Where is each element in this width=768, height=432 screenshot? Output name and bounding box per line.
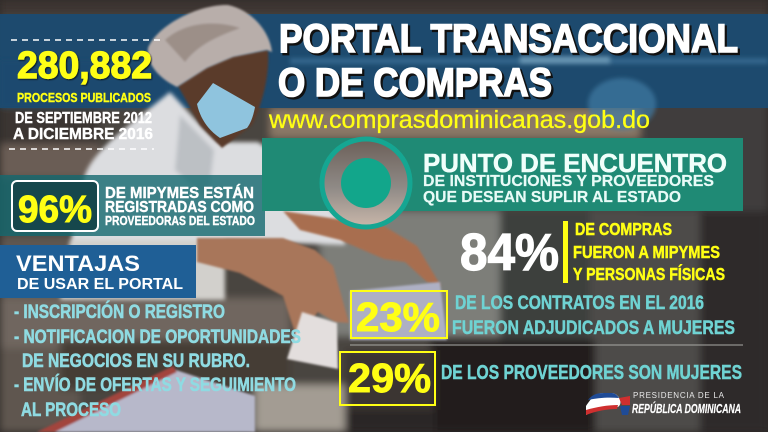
stat: 29%	[340, 352, 742, 405]
84% description	[573, 219, 725, 284]
advantages list: AL PROCESO	[21, 400, 121, 421]
worker arms and hand	[197, 211, 441, 342]
84% description: FUERON A MIPYMES	[573, 242, 720, 262]
icon: flag	[586, 393, 630, 415]
mipymes text: REGISTRADAS COMO	[105, 199, 254, 216]
panel: ventajas heading: VENTAJAS	[16, 251, 140, 276]
panel: ventajas heading: DE USAR EL PORTAL	[17, 276, 183, 293]
panel: punto de encuentro	[262, 138, 743, 227]
title	[278, 17, 740, 107]
stat: 29%: 29%	[348, 355, 431, 401]
hairnet	[148, 5, 272, 87]
stat: 84%: 84%	[460, 224, 559, 282]
title: O DE COMPRAS	[280, 63, 554, 107]
advantages list: DE NEGOCIOS EN SU RUBRO.	[22, 351, 250, 372]
icon: target circle	[322, 139, 410, 227]
photo subject: worker	[37, 5, 447, 432]
panel: 96% mipymes	[0, 175, 265, 236]
84% description: DE COMPRAS	[575, 219, 672, 239]
website url: www.comprasdominicanas.gob.do	[268, 106, 650, 134]
punto heading: PUNTO DE ENCUENTRO	[423, 148, 727, 178]
date range: A DICIEMBRE 2016	[13, 126, 153, 143]
23% description: DE LOS CONTRATOS EN EL 2016	[455, 292, 704, 314]
date range	[13, 110, 153, 143]
96% box: 96%	[18, 189, 92, 231]
number 280,882: 280,882	[17, 45, 152, 87]
mipymes text: PROVEEDORAS DEL ESTADO	[105, 214, 255, 228]
worker neck and face	[178, 50, 268, 148]
23% description	[452, 292, 735, 339]
advantages list: - ENVÍO DE OFERTAS Y SEGUIMIENTO	[14, 374, 296, 396]
punto description: QUE DESEAN SUPLIR AL ESTADO	[423, 189, 681, 206]
stat: 23%	[351, 291, 735, 340]
title: O DE COMPRAS	[278, 61, 552, 105]
logo: presidencia	[586, 391, 741, 416]
advantages list: - INSCRIPCIÓN O REGISTRO	[14, 301, 225, 323]
advantages list	[14, 301, 301, 421]
mipymes text	[105, 183, 255, 228]
date range: DE SEPTIEMBRE 2012	[15, 110, 152, 127]
top blue band	[0, 14, 768, 108]
left stats: processes published	[9, 40, 160, 149]
punto description: DE INSTITUCIONES Y PROVEEDORES	[423, 173, 714, 190]
panel: ventajas heading	[0, 245, 196, 298]
mipymes text: DE MIPYMES ESTÁN	[105, 183, 254, 202]
label processes: PROCESOS PUBLICADOS	[17, 90, 151, 105]
face mask	[197, 83, 255, 138]
logo: presidencia: PRESIDENCIA DE LA	[633, 391, 725, 400]
stat: 23%: 23%	[356, 294, 440, 340]
stat: 84%	[460, 219, 725, 284]
band texture: machinery	[0, 56, 768, 130]
advantages list: - NOTIFICACION DE OPORTUNIDADES	[14, 327, 301, 348]
worker shirt	[60, 92, 345, 300]
product boxes	[37, 282, 447, 432]
84% description: Y PERSONAS FÍSICAS	[573, 263, 725, 284]
punto description	[423, 173, 714, 206]
